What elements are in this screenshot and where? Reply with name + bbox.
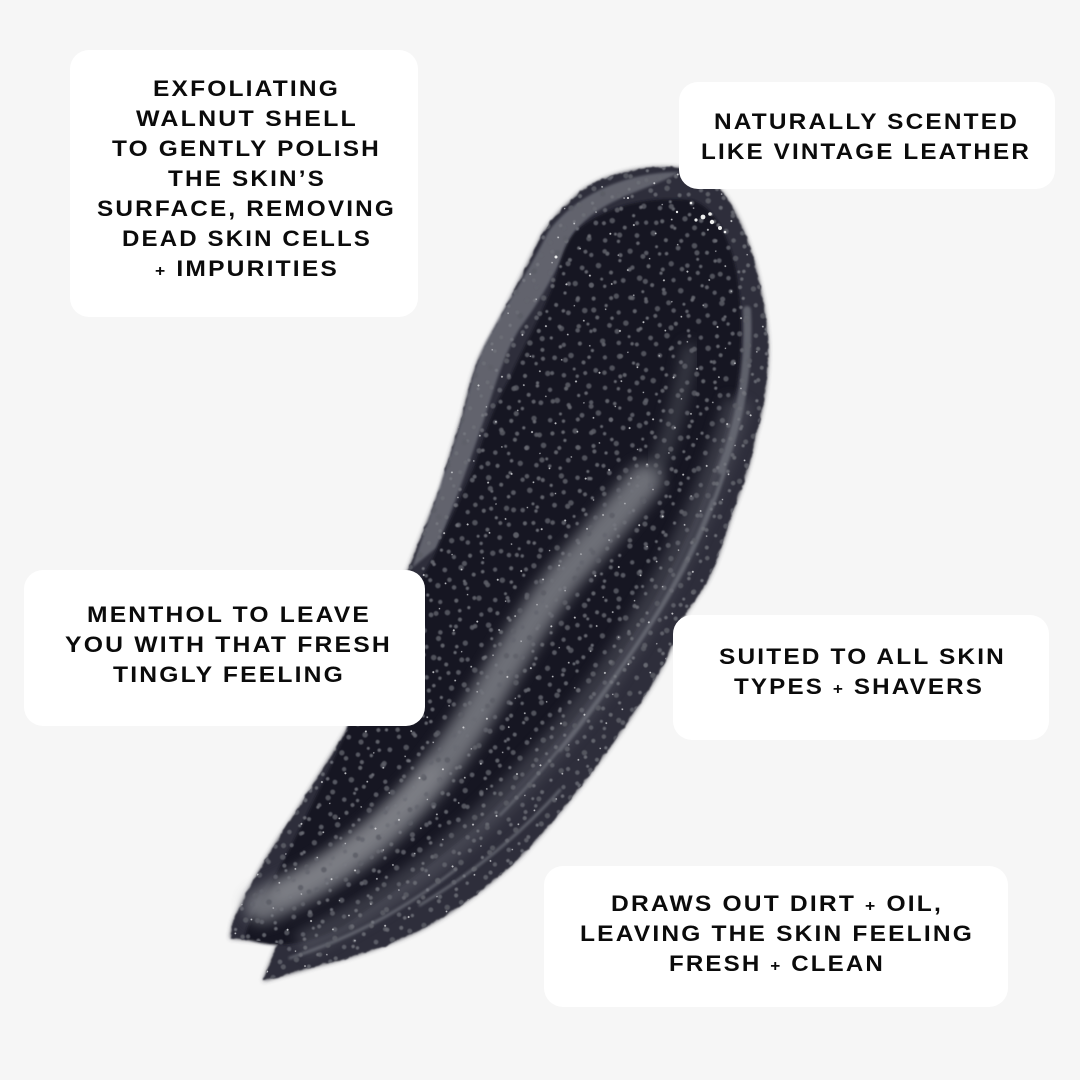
panel: suited to all skin types: SUITED TO ALL SKIN (719, 644, 1006, 669)
product smear: charcoal scrub swatch (220, 155, 780, 985)
panel: suited to all skin types: TYPES + SHAVERS (734, 674, 984, 699)
right rim and lower edge streaks (290, 310, 747, 958)
soft lower-right band (300, 400, 738, 945)
panel: menthol: YOU WITH THAT FRESH (65, 632, 392, 657)
panel: menthol: MENTHOL TO LEAVE (87, 602, 371, 627)
panel: suited to all skin types (673, 615, 1049, 740)
light streak through the smear (262, 480, 645, 906)
panel: menthol: TINGLY FEELING (113, 662, 345, 687)
panel: exfoliating walnut shell: THE SKIN’S (168, 166, 326, 191)
top band and left rim in mid grey (412, 172, 680, 568)
panel: draws out dirt and oil: LEAVING THE SKIN FEELING (580, 921, 974, 946)
exfoliating speckles (220, 155, 780, 985)
panel: draws out dirt and oil (544, 866, 1008, 1007)
panel: draws out dirt and oil: DRAWS OUT DIRT + OIL, (611, 891, 943, 916)
glossy highlights (554, 197, 726, 258)
panel: naturally scented (679, 82, 1055, 189)
panel: exfoliating walnut shell: DEAD SKIN CELLS (122, 226, 372, 251)
panel: exfoliating walnut shell: TO GENTLY POLISH (112, 136, 381, 161)
panel: menthol (24, 570, 425, 726)
panel: naturally scented: LIKE VINTAGE LEATHER (701, 139, 1031, 164)
panel: exfoliating walnut shell: WALNUT SHELL (136, 106, 358, 131)
panel: naturally scented: NATURALLY SCENTED (714, 109, 1019, 134)
dark core (245, 199, 741, 944)
panel: draws out dirt and oil: FRESH + CLEAN (669, 951, 885, 976)
panel: exfoliating walnut shell: + IMPURITIES (155, 256, 339, 281)
panel: exfoliating walnut shell: EXFOLIATING (153, 76, 340, 101)
panel: exfoliating walnut shell (70, 50, 418, 317)
panel: exfoliating walnut shell: SURFACE, REMOVING (97, 196, 396, 221)
